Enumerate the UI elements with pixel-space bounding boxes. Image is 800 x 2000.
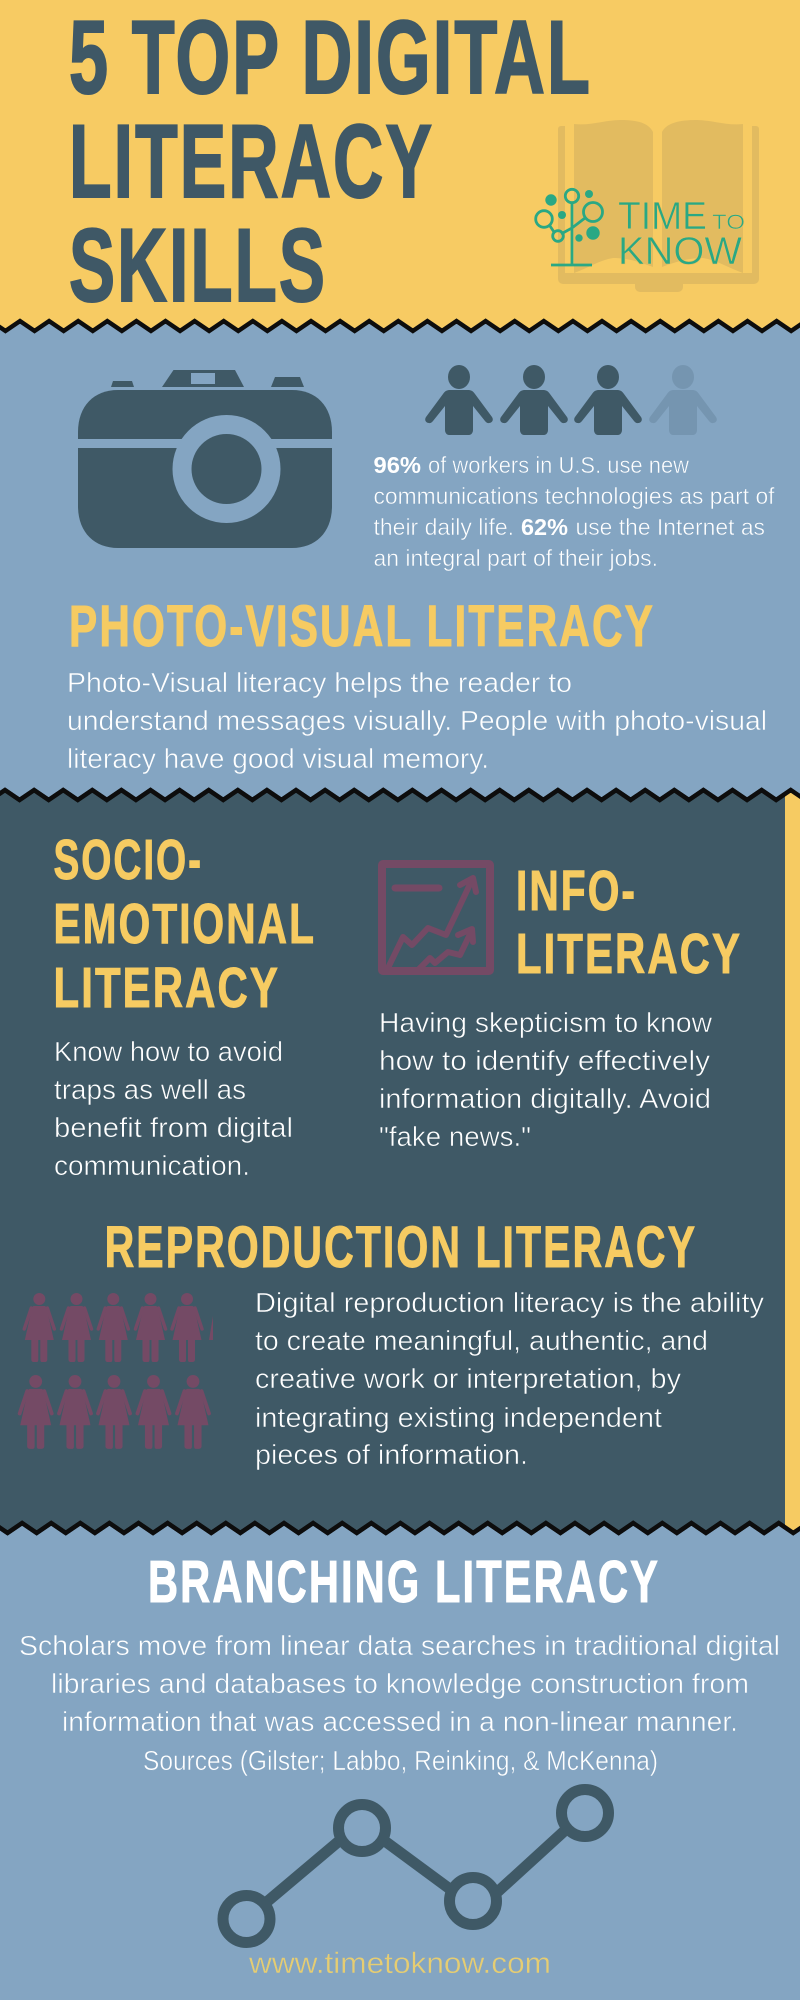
icon: logo tree xyxy=(536,189,602,265)
title: SKILLS xyxy=(69,208,327,324)
heading: socio-emotional literacy xyxy=(54,828,316,1020)
sources line: Sources (Gilster; Labbo, Reinking, & McKenna) xyxy=(143,1745,658,1776)
icon: people 3 of 4 xyxy=(425,365,717,435)
text: socio-emotional description xyxy=(54,1036,293,1181)
logo: Time to Know xyxy=(536,189,745,273)
icon: connected nodes line xyxy=(223,1790,608,1942)
statistic text xyxy=(374,452,775,571)
zigzag line over strip top xyxy=(0,790,800,800)
text: reproduction description: creative work or interpretation, by xyxy=(255,1363,681,1394)
text: branching description xyxy=(19,1630,780,1776)
logo wordmark: TO xyxy=(712,211,745,234)
statistic text: their daily life. xyxy=(374,514,514,540)
text: reproduction description: to create meaningful, authentic, and xyxy=(255,1325,708,1356)
text: socio-emotional description: Know how to avoid xyxy=(54,1036,283,1067)
heading: socio-emotional literacy: SOCIO- xyxy=(54,828,203,892)
text: reproduction description: pieces of information. xyxy=(255,1439,528,1470)
text: photo-visual description xyxy=(67,667,767,774)
text: branching description: Scholars move from linear data searches in traditional digital xyxy=(19,1630,780,1661)
icon: camera xyxy=(78,370,332,548)
text: socio-emotional description: communication. xyxy=(54,1150,250,1181)
title: LITERACY xyxy=(69,104,434,220)
heading: info-literacy: INFO- xyxy=(516,859,637,923)
logo wordmark: TIME xyxy=(618,195,707,238)
icon: rows of women xyxy=(20,1293,213,1449)
zigzag line over strip bottom xyxy=(0,1523,800,1533)
statistic text: 96% xyxy=(374,452,421,478)
text: reproduction description xyxy=(255,1287,764,1470)
text: socio-emotional description: benefit from digital xyxy=(54,1112,293,1143)
zigzag divider: dark panel / branching xyxy=(0,1523,800,1533)
zigzag divider: title / photo-visual xyxy=(0,321,800,331)
logo wordmark xyxy=(618,195,745,273)
text: photo-visual description: understand messages visually. People with photo-visual xyxy=(67,705,767,736)
text: reproduction description: Digital reproduction literacy is the ability xyxy=(255,1287,764,1318)
statistic text: 62% xyxy=(521,514,568,540)
text: branching description: libraries and databases to knowledge construction from xyxy=(51,1668,749,1699)
text: reproduction description: integrating existing independent xyxy=(255,1402,662,1433)
logo wordmark: KNOW xyxy=(618,230,742,273)
text: photo-visual description: literacy have good visual memory. xyxy=(67,743,489,774)
statistic text: communications technologies as part of xyxy=(374,483,775,509)
heading: socio-emotional literacy: EMOTIONAL xyxy=(54,892,316,956)
website url: www.timetoknow.com xyxy=(248,1947,551,1980)
zigzag divider: photo-visual / dark panel xyxy=(0,790,800,800)
icon: open book xyxy=(558,120,759,292)
icon: rising chart xyxy=(382,864,490,971)
text: info-literacy description xyxy=(379,1007,713,1152)
statistic text: an integral part of their jobs. xyxy=(374,545,658,571)
heading: socio-emotional literacy: LITERACY xyxy=(54,956,280,1020)
text: socio-emotional description: traps as well as xyxy=(54,1074,246,1105)
yellow side strip xyxy=(785,790,800,1533)
title xyxy=(69,0,592,324)
statistic text: of workers in U.S. use new xyxy=(428,452,689,478)
text: info-literacy description: Having skepticism to know xyxy=(379,1007,713,1038)
statistic text: use the Internet as xyxy=(576,514,765,540)
heading: info-literacy xyxy=(516,859,742,986)
text: photo-visual description: Photo-Visual literacy helps the reader to xyxy=(67,667,572,698)
text: info-literacy description: "fake news." xyxy=(379,1121,531,1152)
text: info-literacy description: how to identify effectively xyxy=(379,1045,710,1076)
text: info-literacy description: information digitally. Avoid xyxy=(379,1083,711,1114)
text: branching description: information that was accessed in a non-linear manner. xyxy=(62,1706,738,1737)
